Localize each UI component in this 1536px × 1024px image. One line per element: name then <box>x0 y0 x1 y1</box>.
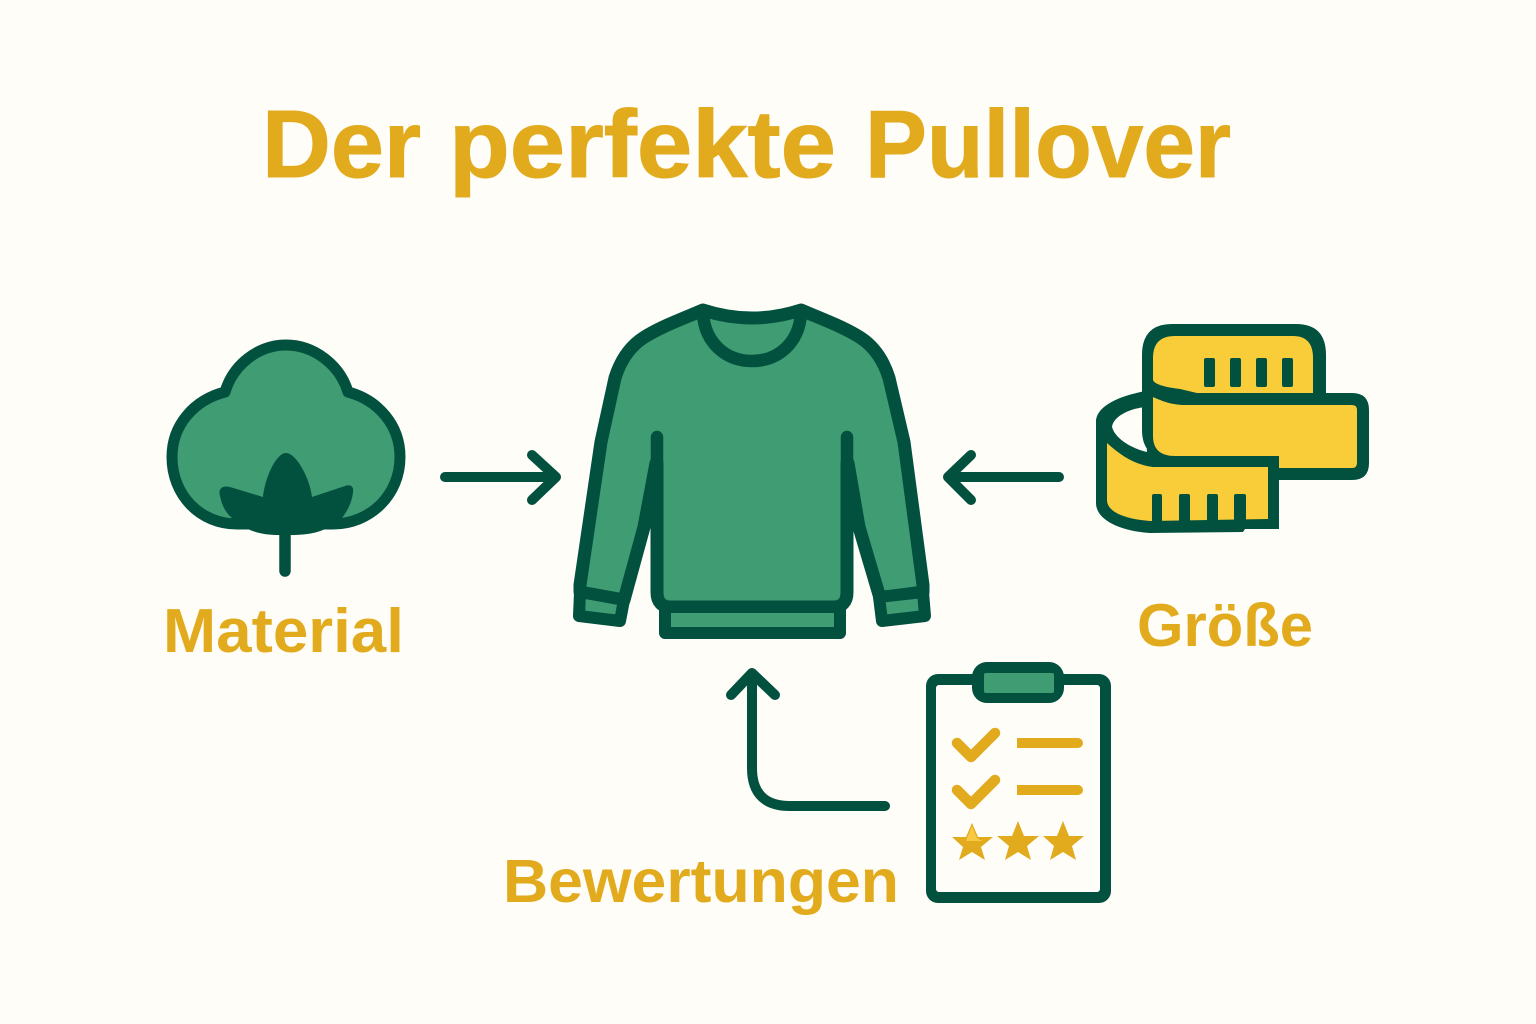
tape lower fill <box>1107 443 1268 521</box>
title: perfekte <box>449 91 836 198</box>
arrow: material to pullover <box>445 455 556 500</box>
tape upper outline <box>1142 324 1369 480</box>
title: Pullover <box>865 91 1231 198</box>
collar inner <box>703 312 801 361</box>
icon: cotton plant (material) <box>172 345 400 571</box>
title: Der <box>262 91 421 198</box>
clipboard clip fill <box>984 673 1054 693</box>
star highlight <box>966 826 982 841</box>
arrow: reviews to pullover <box>731 673 885 806</box>
tape hole <box>1112 407 1147 452</box>
cotton leaves <box>219 453 353 535</box>
cotton boll <box>172 345 400 524</box>
right cuff <box>879 592 925 621</box>
label: Material: Material <box>163 597 404 666</box>
rating stars <box>952 821 1084 860</box>
clipboard board outline <box>926 674 1111 903</box>
icon: measuring tape <box>1096 324 1369 533</box>
tape top fill <box>1153 336 1313 393</box>
collar ring <box>703 314 801 361</box>
title <box>262 91 1231 198</box>
tape middle band fill <box>1153 397 1357 468</box>
hem band <box>665 607 840 633</box>
arrow: size to pullover <box>948 455 1059 500</box>
pullover body and sleeves <box>580 310 923 607</box>
icon: pullover <box>579 310 925 633</box>
cotton stem <box>279 530 291 571</box>
icon: clipboard <box>926 662 1111 903</box>
label: Größe: Größe <box>1137 592 1313 659</box>
label: Bewertungen: Bewertungen <box>503 847 899 915</box>
left cuff <box>579 592 624 621</box>
check marks <box>957 733 995 804</box>
clipboard clip outline <box>972 662 1064 703</box>
armpit seams <box>657 437 847 470</box>
clipboard paper <box>936 685 1100 892</box>
text lines <box>1017 738 1083 795</box>
tape ticks top <box>1204 358 1293 387</box>
tape lower outline <box>1096 391 1279 533</box>
tape ticks bottom <box>1152 494 1246 525</box>
